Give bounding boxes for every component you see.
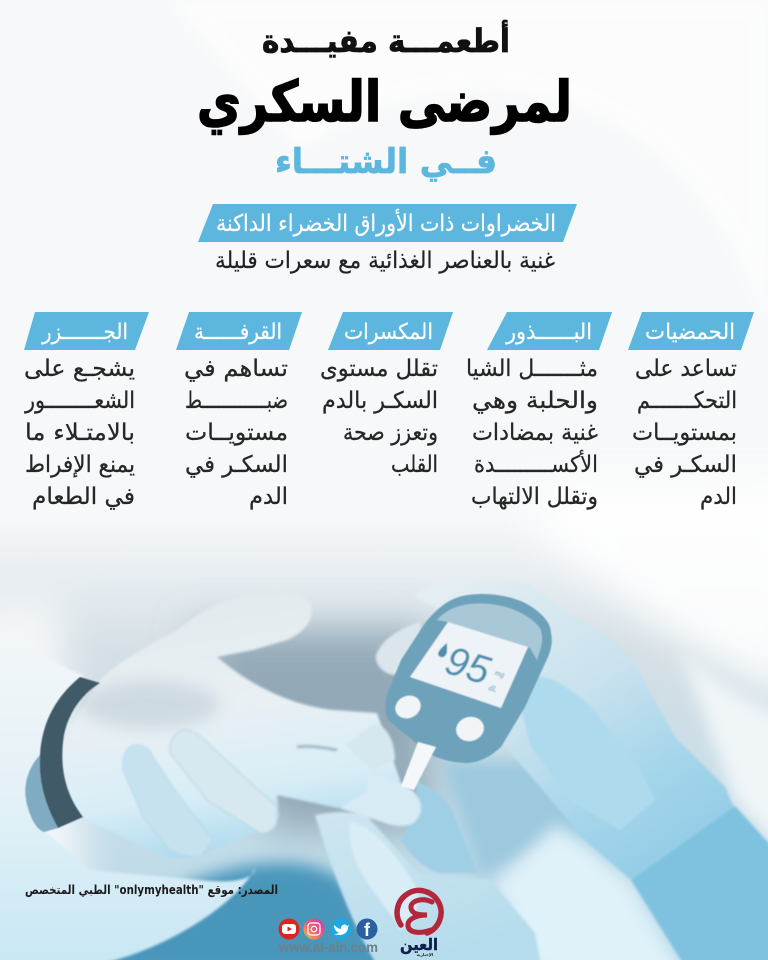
panel: seeds <box>466 312 612 510</box>
photo: patient open hand <box>63 591 400 859</box>
icon: youtube <box>278 918 300 940</box>
panel: seeds: غنية بمضادات <box>472 420 598 446</box>
photo: patient sleeve <box>0 630 255 960</box>
mg/dL unit: mg <box>494 668 506 679</box>
meter screen <box>410 622 528 708</box>
banner: dark leafy greens: الخضراوات ذات الأوراق الخضراء الداكنة <box>216 209 556 237</box>
panel: citrus: الحمضيات <box>645 320 735 345</box>
panel: cinnamon: ضبــــــــــــط <box>185 388 288 414</box>
panel: citrus: السكـر في <box>634 452 737 478</box>
logo: al-ain: الإخبارية <box>417 952 434 958</box>
panel: seeds: والحلبة وهي <box>472 388 598 414</box>
panel: citrus: تساعد على <box>635 356 737 382</box>
drop icon <box>438 643 447 657</box>
panel: nuts <box>320 312 453 478</box>
icon: instagram <box>304 918 324 940</box>
panel: nuts: السكـر بالدم <box>322 388 438 414</box>
panel: citrus <box>628 312 754 510</box>
panel: citrus: بمستويــات <box>632 420 737 446</box>
panel: cinnamon: مستويــات <box>185 420 288 446</box>
panel: nuts: تقلل مستوى <box>320 356 438 382</box>
finger shadow gap <box>297 746 337 750</box>
panel: carrots: في الطعام <box>32 484 135 510</box>
blood glucose meter <box>385 594 552 790</box>
panel: citrus: التحكـــــــم <box>637 388 737 414</box>
panel: cinnamon: الدم <box>249 484 288 510</box>
title block <box>197 20 572 182</box>
panel: nuts: وتعزز صحة <box>343 420 438 446</box>
panel: carrots: بالامتـلاء ما <box>25 420 135 446</box>
panel: carrots: يمنع الإفراط <box>25 452 135 478</box>
logo: al-ain: العين <box>400 935 438 954</box>
source line: المصدر: موقع "onlymyhealth" الطبي المتخصص <box>25 882 278 897</box>
panel: nuts: المكسرات <box>344 320 433 345</box>
panel: carrots: الجـــــــزر <box>41 320 128 345</box>
panel: seeds: الأكســـــــــدة <box>474 450 598 478</box>
panel: cinnamon: تساهم في <box>184 356 288 382</box>
panel: cinnamon <box>176 312 302 510</box>
photo: lower gloved hand <box>315 725 541 960</box>
panel: carrots <box>24 312 149 510</box>
panel: seeds: وتقلل الالتهاب <box>471 484 598 510</box>
panel: citrus: الدم <box>700 484 737 510</box>
patient finger one <box>123 745 213 857</box>
mg/dL unit: dL <box>487 683 499 694</box>
photo: watch band <box>25 677 100 832</box>
test strip <box>401 742 436 790</box>
panel: cinnamon: القرفــــــة <box>194 320 282 345</box>
panel: carrots: الشعــــــــور <box>24 388 135 414</box>
panel: carrots: يشجـع على <box>24 356 135 382</box>
photo: right gloved hand <box>376 578 768 960</box>
social icons <box>278 918 378 940</box>
meter buttons <box>392 692 487 744</box>
panel: cinnamon: السكـر في <box>185 452 288 478</box>
title line 3: فــي الشتـــاء <box>275 142 497 182</box>
title line 1: أطعمـــة مفيـــدة <box>262 20 510 60</box>
patient finger two <box>170 730 277 833</box>
icon: facebook: f <box>364 920 371 940</box>
logo: al-ain <box>397 890 441 958</box>
panel: seeds: البــــــذور <box>505 320 592 345</box>
panel: nuts: القلب <box>391 452 438 478</box>
panel: seeds: مثـــــــل الشيا <box>466 356 598 382</box>
mg/dL unit <box>487 668 506 694</box>
banner: dark leafy greens <box>198 204 577 242</box>
subtitle: nutrient rich: غنية بالعناصر الغذائية مع سعرات قليلة <box>215 248 555 274</box>
reading 95: 95 <box>440 638 496 694</box>
website url: www.al-ain.com <box>278 939 378 955</box>
icon: twitter <box>330 918 352 940</box>
title line 2: لمرضى السكري <box>197 70 572 135</box>
